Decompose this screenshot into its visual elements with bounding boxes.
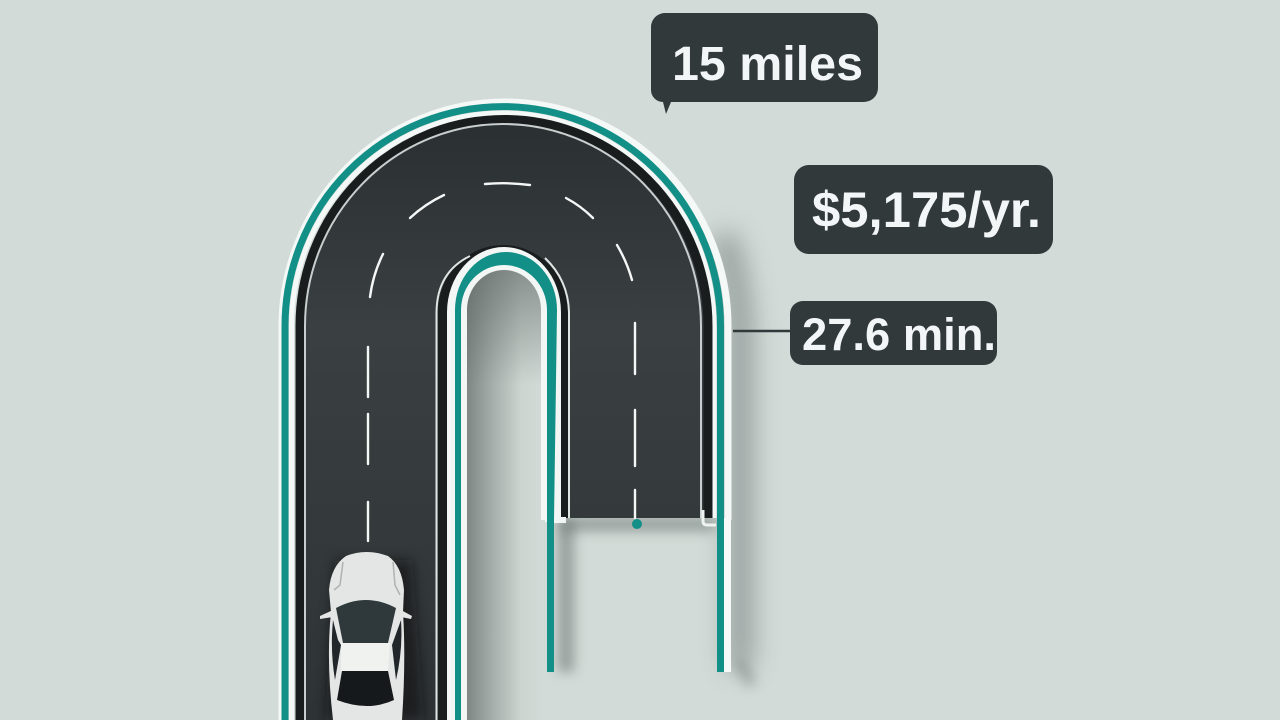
inner guardrail: outer white <box>447 247 561 720</box>
left post <box>547 520 554 672</box>
inner guardrail: inner white <box>461 265 547 720</box>
asphalt over hump base <box>438 245 568 312</box>
car shadow <box>325 560 424 720</box>
inner guardrail: teal <box>455 252 557 720</box>
inner dark strip <box>438 245 568 720</box>
inner hole <box>467 270 545 720</box>
rear window <box>337 671 394 706</box>
thin road edge line <box>305 124 701 720</box>
callout: distance <box>651 13 878 114</box>
car <box>320 552 424 720</box>
callout: time: 27.6 min. <box>802 309 996 360</box>
road end marker <box>632 519 642 529</box>
mirrors <box>320 610 412 619</box>
car body <box>329 552 404 720</box>
side glass <box>332 620 401 680</box>
callout: annual cost <box>794 165 1053 254</box>
dark outer verge <box>300 120 708 720</box>
right post white <box>724 518 731 672</box>
inner hole top shade <box>467 270 541 385</box>
callout: distance: 15 miles <box>672 38 863 91</box>
outer guardrail: white inner <box>292 113 714 720</box>
outer guardrail: teal <box>285 107 720 720</box>
road end details <box>547 510 731 672</box>
inner edge line <box>436 256 569 720</box>
road shadow <box>560 235 752 685</box>
callout: annual cost: $5,175/yr. <box>812 182 1041 238</box>
windshield <box>336 600 396 643</box>
asphalt surface <box>296 118 710 720</box>
road loop <box>282 102 728 720</box>
right post teal <box>717 518 724 672</box>
lane dashes <box>368 183 635 541</box>
roof <box>341 643 390 671</box>
outer guardrail: white edge <box>282 102 728 720</box>
connector to time callout <box>733 330 792 332</box>
hood lines <box>334 562 400 595</box>
